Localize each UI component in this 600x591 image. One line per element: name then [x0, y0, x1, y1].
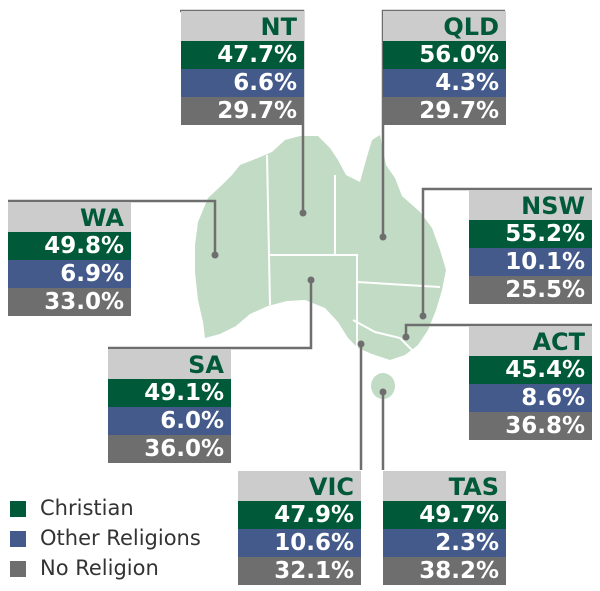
box: ACT: 36.8% [505, 413, 585, 439]
box: SA: 36.0% [144, 436, 224, 462]
box: NSW: NSW [521, 192, 585, 220]
box: NSW: 25.5% [505, 277, 585, 303]
box: TAS: TAS [449, 473, 499, 501]
box: WA: 6.9% [60, 261, 124, 287]
box: WA [8, 202, 131, 316]
box: VIC: VIC [309, 473, 354, 501]
box: VIC: 10.6% [274, 530, 354, 556]
box: QLD: 29.7% [419, 98, 499, 124]
box: WA: WA [80, 204, 124, 232]
box: NSW: 55.2% [505, 221, 585, 247]
box: NT: 6.6% [233, 70, 297, 96]
box: QLD [383, 11, 506, 125]
box: ACT [469, 326, 592, 440]
box: NSW: 10.1% [505, 249, 585, 275]
box: VIC [238, 471, 361, 585]
box: VIC: 47.9% [274, 502, 354, 528]
box: WA: 49.8% [44, 233, 124, 259]
box: SA [108, 349, 231, 463]
box: NT [181, 11, 304, 125]
box: TAS: 38.2% [419, 558, 499, 584]
legend: No Religion: No Religion [40, 556, 159, 580]
box: ACT: 8.6% [521, 385, 585, 411]
box: SA: 49.1% [144, 380, 224, 406]
box: SA: SA [188, 351, 224, 379]
box: TAS: 49.7% [419, 502, 499, 528]
box: NT: NT [261, 13, 297, 41]
box: SA: 6.0% [160, 408, 224, 434]
box: TAS: 2.3% [435, 530, 499, 556]
legend: Christian: Christian [40, 496, 134, 520]
box: NT: 29.7% [217, 98, 297, 124]
box: TAS [383, 471, 506, 585]
box: QLD: QLD [443, 13, 499, 41]
box: QLD: 4.3% [435, 70, 499, 96]
box: QLD: 56.0% [419, 42, 499, 68]
box: WA: 33.0% [44, 289, 124, 315]
legend [10, 496, 201, 580]
box: NSW [469, 190, 592, 304]
box: ACT: ACT [532, 328, 585, 356]
box: NT: 47.7% [217, 42, 297, 68]
legend: Other Religions: Other Religions [40, 526, 201, 550]
box: ACT: 45.4% [505, 357, 585, 383]
box: VIC: 32.1% [274, 558, 354, 584]
